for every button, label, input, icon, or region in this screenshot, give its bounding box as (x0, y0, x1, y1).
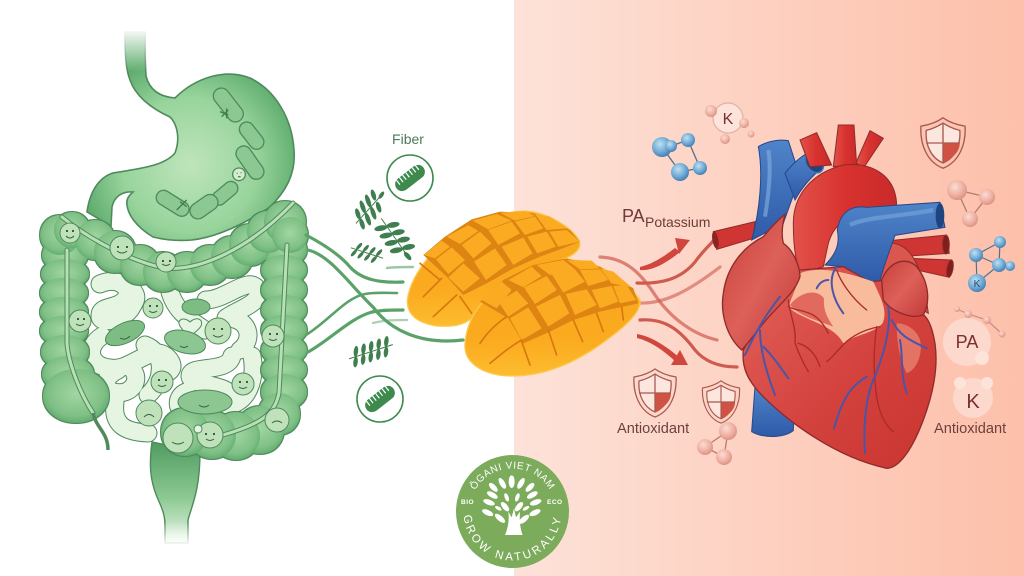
coronary vessels (745, 267, 927, 453)
molecule: K top (705, 103, 754, 144)
colon inner bands (62, 203, 293, 435)
molecule: blue K right (968, 236, 1015, 292)
molecule: pink right (947, 180, 995, 227)
logo side labels (461, 499, 563, 506)
arrow: up to potassium (640, 238, 690, 270)
back mango half (407, 211, 580, 326)
K nutrient bubble (953, 377, 993, 418)
label: PA potassium (622, 206, 710, 230)
logo side labels: BIO (461, 499, 474, 506)
molecule: blue top (652, 133, 707, 181)
shield: top right (921, 118, 965, 168)
red nutrient flow lines (600, 238, 737, 367)
arrow: down to antioxidant (637, 334, 688, 365)
right red vessels (890, 235, 954, 278)
heart (711, 125, 954, 468)
logo top text: ÔGANI VIET NAM (470, 462, 555, 489)
shield: middle antioxidant (702, 381, 740, 423)
stomach and oesophagus (87, 28, 294, 240)
icon: herb sprig 1 (351, 180, 389, 236)
label: antioxidant right: Antioxidant (934, 421, 1006, 437)
mango halves (407, 211, 640, 376)
superior vena cava (752, 140, 827, 240)
left atrium (880, 243, 928, 313)
PA nutrient bubble (943, 306, 1006, 366)
icon: herb sprig 3 (346, 241, 388, 265)
icon: herb sprig 2 (369, 215, 423, 263)
pulmonary artery (825, 202, 945, 282)
label: antioxidant left: Antioxidant (617, 421, 689, 437)
molecule: blue K right: K (974, 279, 981, 290)
logo side labels: ECO (547, 499, 563, 506)
peach fat region (788, 270, 885, 343)
digestive system (40, 28, 308, 546)
icon: fiber bacterium top (387, 155, 433, 201)
appendix (93, 413, 108, 450)
rectum (150, 442, 200, 546)
PA nutrient bubble: PA (956, 332, 978, 352)
stomach bacteria (154, 85, 267, 222)
logo bottom text: GROW NATURALLY (464, 515, 560, 560)
fiber label: Fiber (392, 131, 424, 147)
icon: fiber bacterium bottom (357, 376, 403, 422)
label: PA potassium: Potassium (645, 214, 710, 230)
green fibre flow lines (306, 235, 463, 352)
K nutrient bubble: K (966, 391, 980, 413)
label: PA potassium: PA (622, 206, 645, 226)
inferior vena cava (752, 387, 794, 437)
colon segments (40, 201, 308, 460)
vessel left red (711, 222, 755, 249)
molecule: pink lower (697, 422, 737, 465)
colon (40, 201, 308, 460)
ventricles (743, 267, 936, 468)
front mango half (465, 258, 640, 376)
left auricle (882, 261, 928, 316)
small intestine (92, 281, 258, 433)
aorta and branches (793, 125, 897, 273)
logo tree (481, 475, 542, 535)
logo badge (456, 455, 569, 568)
ventricle highlight (790, 293, 833, 327)
molecule: K top: K (723, 111, 734, 128)
icon: herb sprig 4 (349, 334, 393, 369)
shield: left antioxidant (634, 369, 676, 417)
gut microbes with faces (60, 223, 289, 453)
right atrium (722, 214, 800, 350)
